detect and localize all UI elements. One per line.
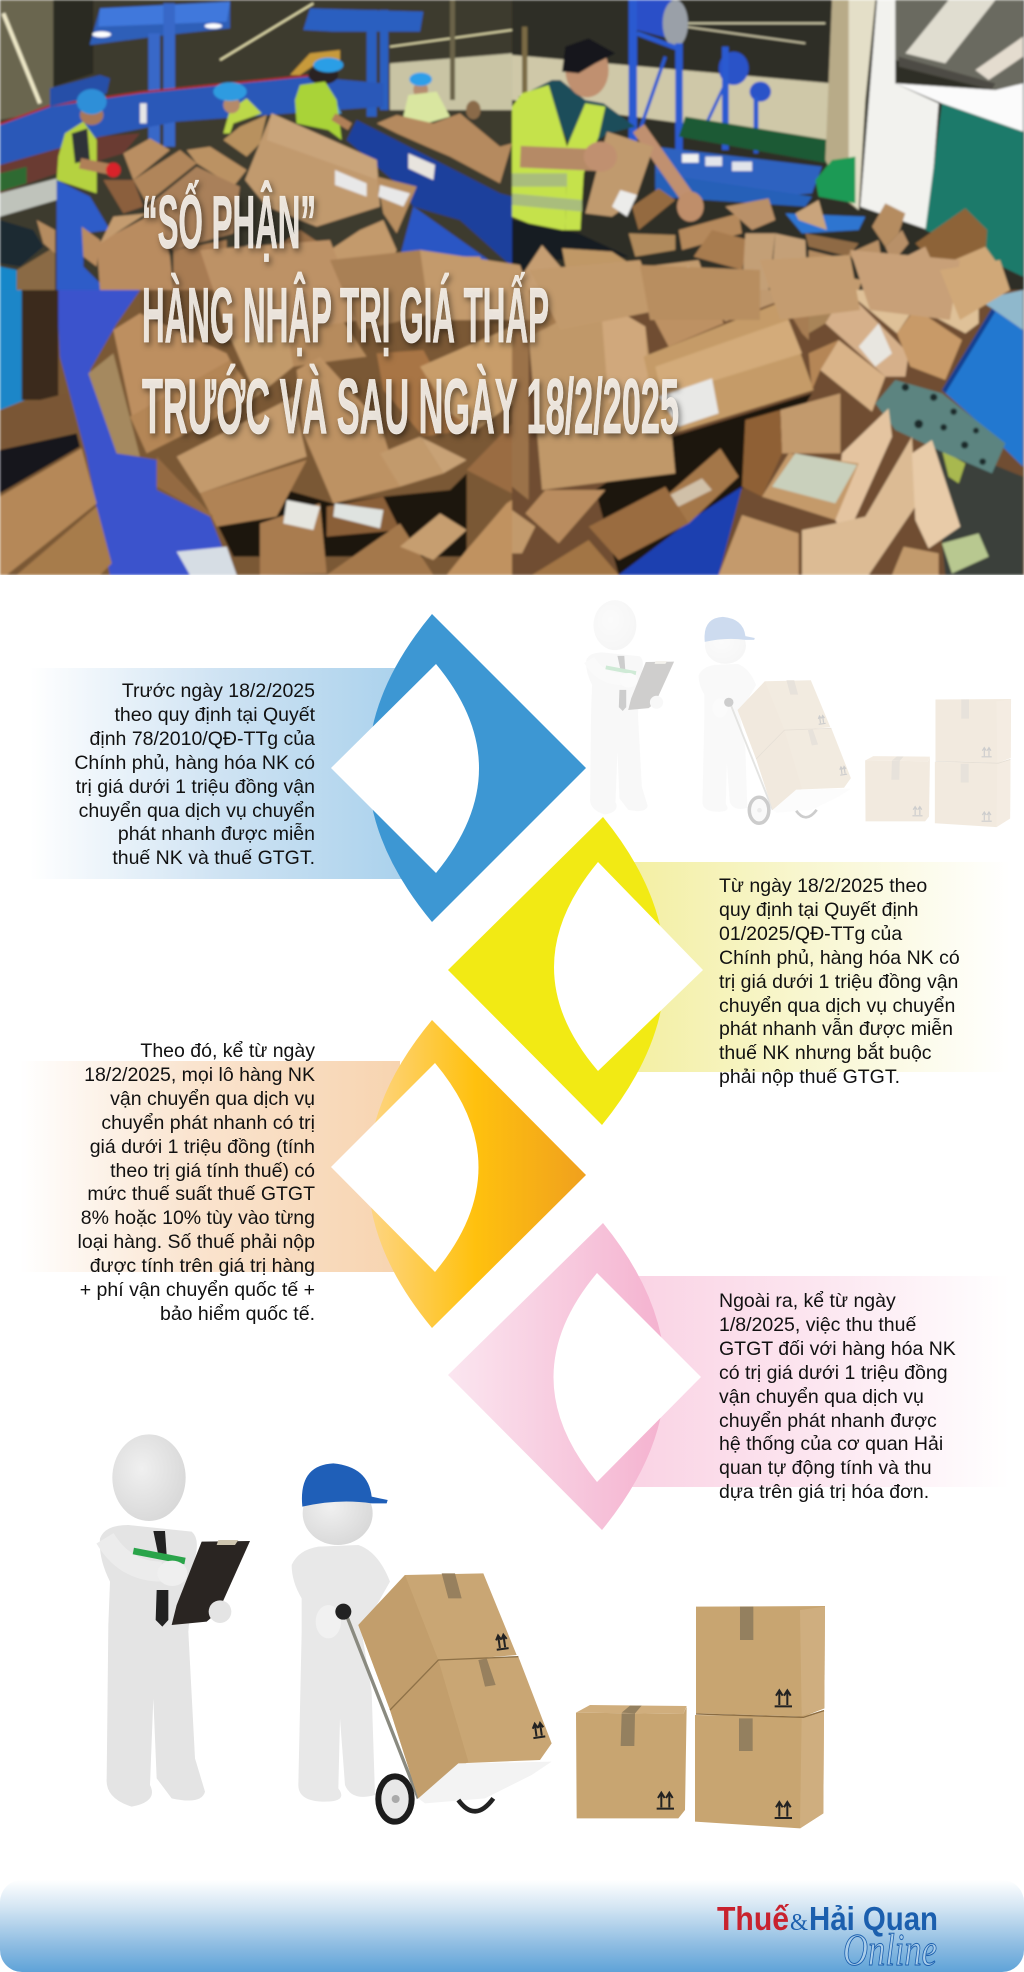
diamond 2: yellow [448,817,703,1125]
diamond 3: orange [331,1020,586,1328]
figure: man with clipboard [100,1434,250,1807]
man in vest [512,38,704,283]
worker 4 [403,73,481,123]
text: step 3: 8% hoặc 10% tùy vào từng [81,1207,315,1229]
text: step 2: Chính phủ, hàng hóa NK có [719,947,960,969]
text: step 2: phải nộp thuế GTGT. [719,1066,900,1088]
text: step 3: Theo đó, kể từ ngày [140,1040,315,1062]
text: step 1: chuyển qua dịch vụ chuyển [79,800,315,822]
band: step 3 background [20,1061,400,1272]
text: step 4: hệ thống của cơ quan Hải [719,1433,943,1455]
logo: Thuế & Hải Quan Online: Thuế [717,1900,790,1937]
text: step 3 [78,1040,315,1325]
text: step 3: theo trị giá tính thuế) có [110,1160,315,1182]
text: step 4: có trị giá dưới 1 triệu đồng [719,1362,948,1384]
text: step 2: phát nhanh vẫn được miễn [719,1018,953,1040]
title: “SỐ PHẬN” [142,180,316,264]
logo: Thuế & Hải Quan Online: & [790,1910,808,1936]
worker 1 [57,89,121,193]
text: step 2: 01/2025/QĐ-TTg của [719,923,902,945]
text: step 4: GTGT đối với hàng hóa NK [719,1338,956,1360]
text: step 4: dựa trên giá trị hóa đơn. [719,1481,929,1503]
text: step 2 [719,875,960,1088]
text: step 3: mức thuế suất thuế GTGT [87,1183,315,1205]
worker 2 [213,82,262,133]
band: step 1 background [30,668,410,879]
text: step 3: chuyển phát nhanh có trị [101,1112,315,1134]
text: step 1: theo quy định tại Quyết [114,704,315,726]
logo: Thuế & Hải Quan Online: Hải Quan [809,1900,938,1937]
text: step 3: 18/2/2025, mọi lô hàng NK [84,1064,315,1086]
diamond 4: pink [448,1223,701,1530]
text: step 1: trị giá dưới 1 triệu đồng vận [76,776,315,798]
text: step 2: thuế NK nhưng bắt buộc [719,1042,932,1064]
text: step 3: bảo hiểm quốc tế. [160,1303,315,1325]
text: step 4: quan tự động tính và thu [719,1457,932,1479]
text: step 4: Ngoài ra, kể từ ngày [719,1290,896,1312]
text: step 1: định 78/2010/QĐ-TTg của [90,728,315,750]
text: step 1 [74,680,315,869]
hero photo: warehouse workers sorting parcels [0,0,1024,575]
text: step 3: loại hàng. Số thuế phải nộp [78,1231,315,1253]
text: step 1: Chính phủ, hàng hóa NK có [74,752,315,774]
logo: Thuế & Hải Quan Online [717,1900,938,1972]
text: step 4: 1/8/2025, việc thu thuế [719,1314,916,1336]
band: step 4 background [630,1276,1010,1487]
footer band [0,1880,1024,1972]
diamond 1: blue [331,614,586,922]
text: step 3: vận chuyển qua dịch vụ [110,1088,315,1110]
text: step 4: vận chuyển qua dịch vụ [719,1386,924,1408]
text: step 4 [719,1290,956,1503]
worker 3 [295,58,350,140]
text: step 1: phát nhanh được miễn [118,823,315,845]
text: step 2: quy định tại Quyết định [719,899,918,921]
figure: man with cap and hand truck [292,1463,552,1822]
text: step 2: Từ ngày 18/2/2025 theo [719,875,927,897]
title [140,180,684,450]
text: step 2: trị giá dưới 1 triệu đồng vận [719,971,958,993]
text: step 1: thuế NK và thuế GTGT. [112,847,315,869]
band: step 2 background [630,862,1010,1072]
text: step 1: Trước ngày 18/2/2025 [122,680,315,702]
text: step 3: giá dưới 1 triệu đồng (tính [90,1136,315,1158]
text: step 3: + phí vận chuyển quốc tế + [80,1279,315,1301]
text: step 2: chuyển qua dịch vụ chuyển [719,995,955,1017]
box: stacked pair [695,1606,825,1828]
text: step 4: chuyển phát nhanh được [719,1410,937,1432]
text: step 3: được tính trên giá trị hàng [90,1255,315,1277]
box: small single [576,1705,687,1818]
